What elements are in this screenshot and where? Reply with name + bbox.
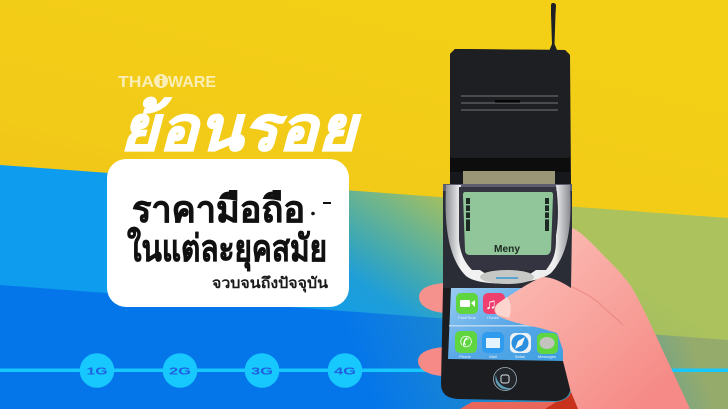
app icons: ✆ — [460, 334, 472, 351]
marker: 1G — [80, 353, 114, 388]
app icons: Safari — [515, 354, 525, 359]
marker: 4G: 4G — [334, 366, 356, 378]
hand: lower fingers behind phone — [418, 283, 575, 409]
app icons — [455, 293, 558, 359]
marker: 3G — [245, 353, 279, 388]
signal bars — [466, 198, 549, 231]
panel: white title card — [107, 159, 349, 307]
app icons: ♫ — [485, 296, 497, 313]
logo: Thaiware: THA — [118, 74, 154, 91]
marker: 2G — [163, 353, 197, 388]
marker: 4G — [328, 353, 362, 388]
home button — [494, 368, 516, 390]
heading: script title: ย้อนรอย — [120, 95, 361, 164]
marker: 3G: 3G — [251, 366, 273, 378]
app icons: iTunes — [487, 315, 499, 320]
red shadow under phone — [545, 392, 578, 409]
app icons: Mail — [489, 354, 497, 359]
app icons: Messages — [538, 354, 556, 359]
app icons: Phone — [459, 354, 472, 359]
background: lower blue band — [0, 285, 728, 409]
flip cover — [450, 49, 571, 185]
Nokia LCD screen — [463, 192, 553, 255]
Nokia screen bezel — [459, 187, 556, 270]
background: middle blue-to-olive band — [0, 165, 728, 409]
title line 1: ราคามือถือ — [132, 189, 305, 230]
title line 2: ในแต่ละยุคสมัย — [127, 226, 327, 272]
thumb nail — [495, 297, 511, 318]
Nokia phone body — [443, 184, 572, 290]
decorative dot and dash — [311, 202, 331, 215]
subtitle: จวบจนถึงปัจจุบัน — [212, 274, 329, 293]
antenna — [550, 3, 557, 50]
iPhone lower half — [441, 288, 571, 401]
hand: palm and thumb over screen — [494, 228, 690, 409]
iOS screen — [448, 288, 565, 361]
timeline: generation markers — [0, 353, 728, 388]
marker: 1G: 1G — [86, 366, 108, 378]
menu label: Meny — [494, 244, 520, 255]
logo: Thaiware: WARE — [168, 74, 216, 91]
knuckle crease — [572, 287, 623, 325]
marker: 2G: 2G — [169, 366, 191, 378]
app icons: FaceTime — [458, 315, 477, 320]
nokia navi key — [480, 270, 534, 284]
logo: Thaiware — [118, 74, 216, 91]
illustration: hand holding combined phone — [418, 3, 690, 409]
